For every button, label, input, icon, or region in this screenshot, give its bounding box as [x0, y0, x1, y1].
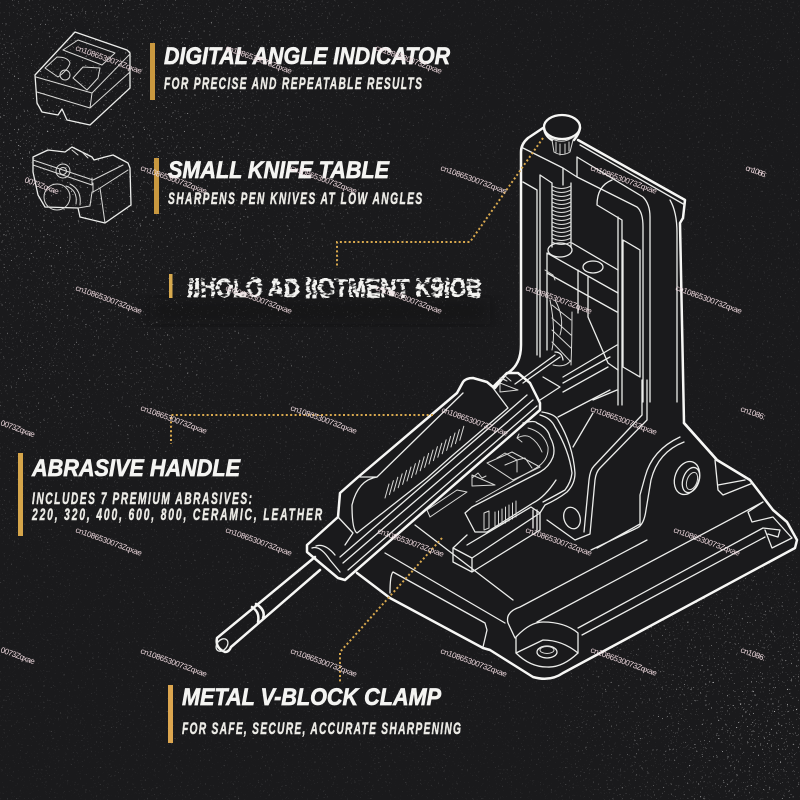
inner channels — [547, 380, 647, 540]
icon: small knife table — [33, 147, 131, 223]
heading block: degraded knob label: IIHOLO AD IIOTMENT K9IOB — [188, 273, 482, 303]
watermarks: cn1086530073Zqxae — [440, 405, 510, 438]
watermarks: cn1086530073Zqxae — [439, 646, 509, 679]
watermarks: cn1086530073Zqxae — [224, 43, 294, 76]
watermarks: cn1086530073Zqxae — [376, 526, 446, 559]
heading block: abrasive handle: INCLUDES 7 PREMIUM ABRASIVES: — [32, 490, 252, 508]
heading block: small knife table: SMALL KNIFE TABLE — [168, 157, 390, 184]
heading block: metal v-block clamp — [168, 684, 461, 743]
watermarks: cn1086530073Zqxae — [289, 163, 359, 196]
watermarks: cn1086530073Zqxae — [589, 645, 659, 678]
watermarks: cn1086530073Zqxae — [439, 163, 509, 196]
callout line: knob — [337, 138, 543, 268]
watermarks: cn1086530073Zqxae — [74, 283, 144, 316]
watermarks: cn1086530073Zqxae — [374, 283, 444, 316]
heading block: digital angle indicator: DIGITAL ANGLE INDICATOR — [164, 43, 451, 70]
adjustment screw — [670, 458, 704, 498]
slot — [427, 490, 467, 517]
connecting rods — [515, 345, 617, 400]
heading block: small knife table: SHARPENS PEN KNIVES AT LOW ANGLES — [168, 190, 423, 208]
base plate — [357, 423, 797, 679]
slider block — [547, 240, 640, 377]
watermarks: cn1086: — [739, 645, 767, 663]
watermarks: cn1086530073Zqxae — [289, 403, 359, 436]
watermarks: cn1086530073Zqxae — [524, 525, 594, 558]
threaded screw — [548, 183, 572, 257]
watermarks: cn1086530073Zqxae — [374, 43, 444, 76]
watermarks: 0073Zqxae — [0, 645, 37, 666]
callout line: clamp — [340, 538, 442, 682]
watermarks: 0073Zqxae — [23, 175, 61, 196]
v-block clamp base — [453, 507, 540, 572]
handle body — [307, 373, 540, 580]
silhouette — [307, 115, 797, 680]
callout line: handle — [171, 415, 433, 444]
heading block: abrasive handle — [18, 453, 322, 536]
icon: digital angle indicator — [35, 32, 130, 125]
heading block: digital angle indicator — [150, 43, 451, 100]
watermarks: cn1086530073Zqxae — [589, 404, 659, 437]
abrasive rod — [217, 557, 320, 652]
watermarks: cn1086530073Zqxae — [74, 525, 144, 558]
watermarks: cn1086530073Zqxae — [524, 283, 594, 316]
oval hole — [561, 505, 583, 531]
watermarks: cn1086530073Zqxae — [289, 646, 359, 679]
upright frame — [495, 115, 717, 460]
watermarks: cn1086530073Zqxae — [224, 525, 294, 558]
heading block: abrasive handle: 220, 320, 400, 600, 800, CERAMIC, LEATHER — [31, 506, 322, 524]
watermarks: cn1086530073Zqxae — [139, 646, 209, 679]
watermarks: cn1086: — [739, 404, 767, 422]
watermarks: cn1086530073Zqxae — [589, 163, 659, 196]
rotating arc assembly — [465, 390, 610, 532]
watermarks: cn1086530073Zqxae — [224, 283, 294, 316]
mounting boss — [516, 622, 578, 667]
watermarks: cn1086530073Zqxae — [139, 403, 209, 436]
watermarks: cn1086530073Zqxae — [674, 283, 744, 316]
watermarks — [0, 43, 768, 679]
watermarks: cn1086530073Zqxae — [74, 43, 144, 76]
machine illustration — [214, 115, 797, 680]
heading block: metal v-block clamp: METAL V-BLOCK CLAMP — [182, 684, 442, 711]
watermarks: 0073Zqxae — [0, 418, 37, 439]
watermarks: cn1086530073Zqxae — [139, 163, 209, 196]
adjustment knob — [544, 115, 580, 155]
watermarks: cn1086530073Zqxae — [672, 525, 742, 558]
heading block: metal v-block clamp: FOR SAFE, SECURE, ACCURATE SHARPENING — [182, 720, 461, 738]
heading block: digital angle indicator: FOR PRECISE AND REPEATABLE RESULTS — [164, 75, 423, 93]
chevron mark — [500, 375, 518, 392]
heading block: abrasive handle: ABRASIVE HANDLE — [31, 455, 241, 482]
watermarks: cn1086: — [744, 163, 768, 179]
heading block: small knife table — [154, 157, 423, 214]
